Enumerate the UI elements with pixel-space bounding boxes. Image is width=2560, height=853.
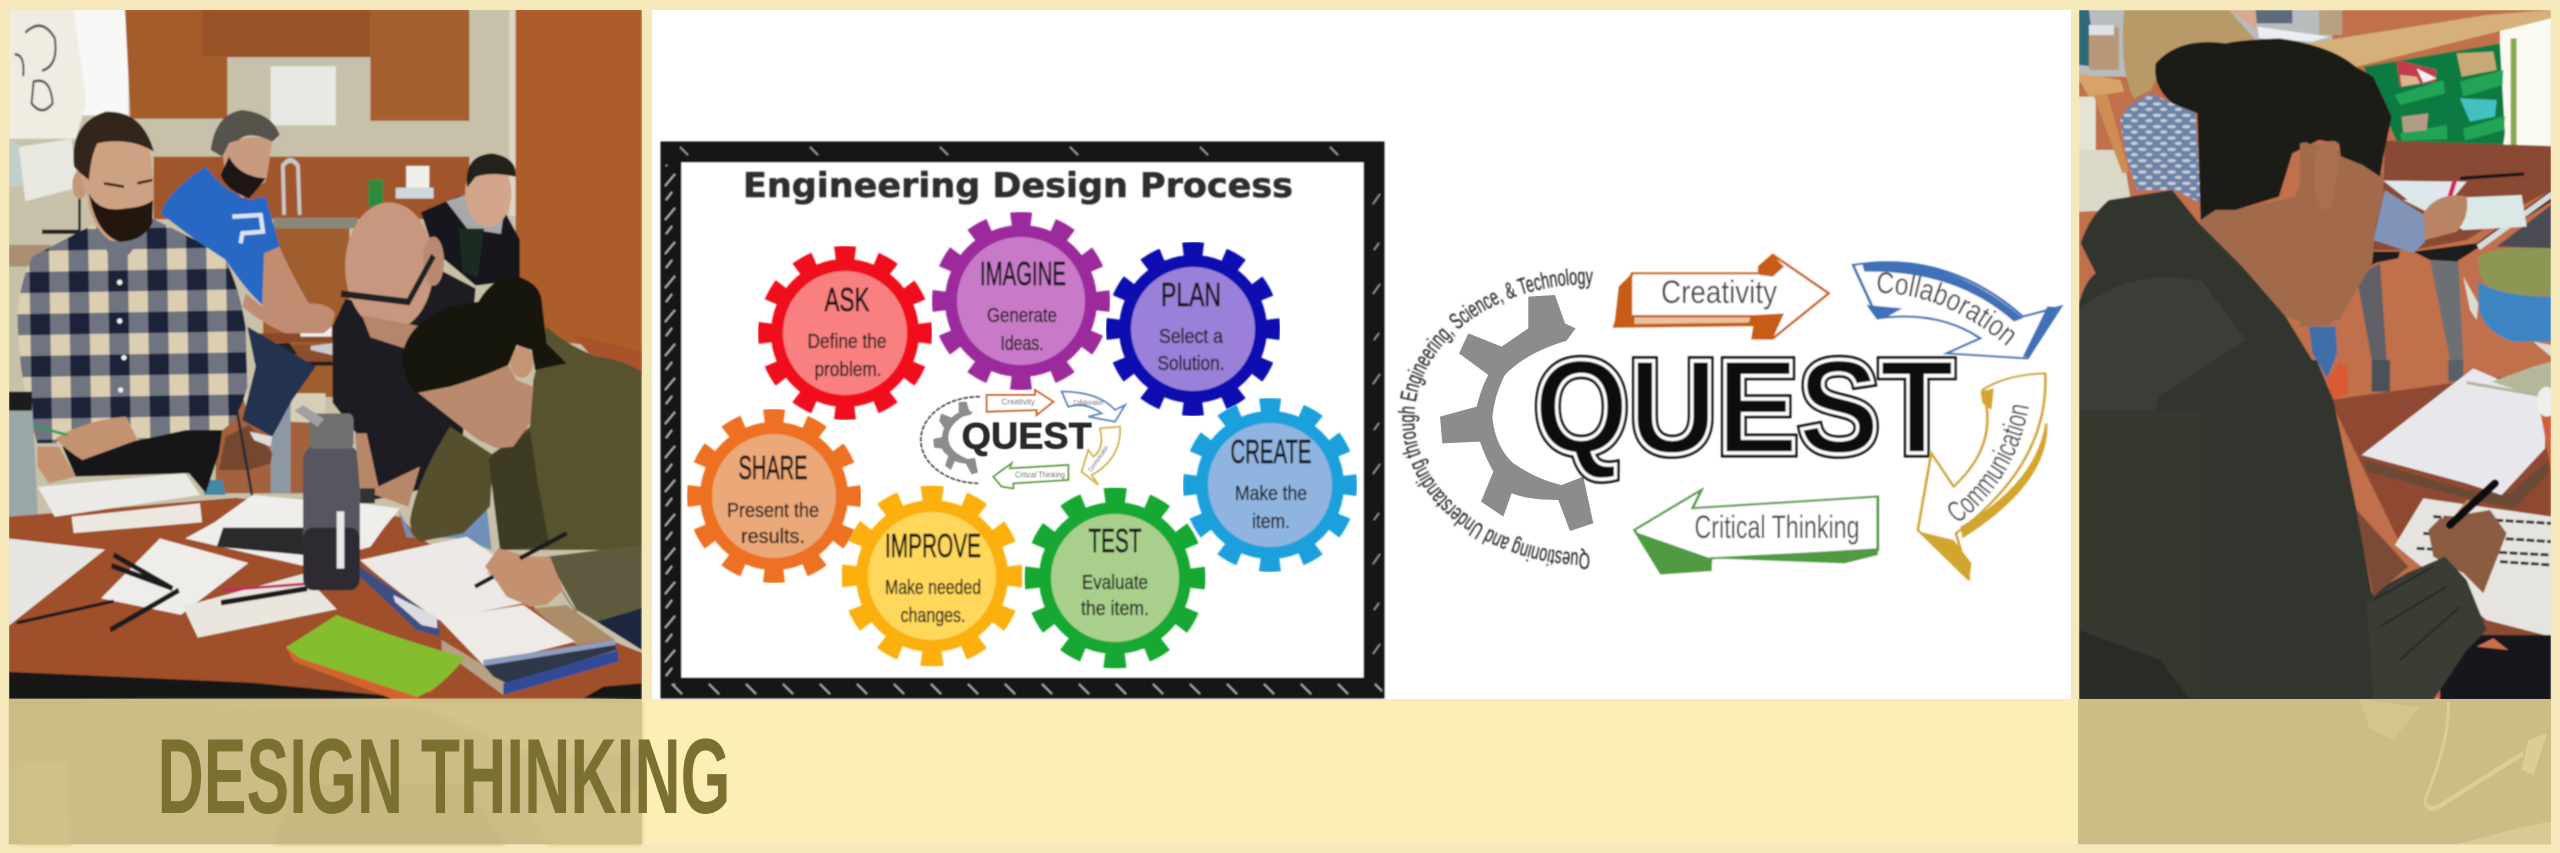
photo reflection behind title: right [2078, 699, 2551, 844]
gear: IMPROVE: IMPROVE [885, 527, 981, 564]
arrow: Collaboration: Collaboration [1876, 270, 2016, 346]
panel: QUEST logo [1396, 252, 2064, 582]
QUEST wordmark: QUEST [1534, 333, 1954, 482]
center panel background [652, 10, 2071, 699]
arrow: Communication: Communication [1947, 404, 2030, 522]
title: DESIGN THINKING [158, 716, 730, 836]
gear: TEST: Evaluate [1082, 572, 1148, 594]
photo reflection behind title: left [9, 699, 642, 844]
gear: SHARE: results. [741, 526, 805, 548]
mini QUEST logo: Creativity [1002, 397, 1035, 406]
photo: student writing at a desk [2079, 10, 2557, 700]
QUEST wordmark: QUEST [1534, 333, 1954, 482]
gear: IMPROVE [850, 494, 1014, 658]
gear: ASK: Define the [808, 331, 886, 353]
gear: TEST [1033, 496, 1197, 660]
gear: PLAN [1114, 250, 1272, 408]
gear: SHARE [695, 417, 853, 575]
arrow: Creativity: Creativity [1661, 274, 1777, 310]
mini QUEST logo [921, 390, 1125, 488]
gear: IMAGINE: Ideas. [1000, 333, 1044, 355]
gear: IMAGINE: IMAGINE [980, 255, 1066, 292]
gear: IMPROVE: changes. [900, 605, 966, 627]
gear: IMAGINE [940, 220, 1102, 382]
gear: ASK [766, 254, 924, 412]
gear: CREATE [1191, 406, 1349, 564]
gear: CREATE: CREATE [1230, 433, 1312, 470]
mini QUEST logo: QUEST [962, 414, 1092, 456]
chalk frame [662, 143, 1383, 698]
gear: CREATE: item. [1252, 511, 1290, 533]
gear: TEST: TEST [1088, 522, 1142, 559]
gear: TEST: the item. [1081, 598, 1149, 620]
title band [9, 699, 2551, 844]
icon: grey gear [1440, 295, 1593, 531]
arrow: Collaboration [1850, 260, 2064, 360]
gear: PLAN: Solution. [1158, 353, 1224, 375]
arrow: Creativity [1614, 255, 1829, 338]
panel: Engineering Design Process chart [662, 143, 1383, 698]
mini QUEST logo: Communication [1087, 445, 1110, 473]
arrow: Communication [1916, 371, 2048, 582]
gear: IMPROVE: Make needed [885, 577, 981, 599]
gear: ASK: problem. [814, 359, 882, 381]
arrow: Critical Thinking [1634, 490, 1878, 573]
chart heading: Engineering Design Process [743, 166, 1293, 206]
mini QUEST logo: Collaboration [1073, 398, 1103, 407]
mini QUEST logo: Critical Thinking [1015, 470, 1065, 479]
gear: SHARE: SHARE [738, 449, 808, 486]
gear: ASK: ASK [824, 281, 870, 318]
gear: IMAGINE: Generate [987, 305, 1057, 327]
gear: PLAN: PLAN [1161, 276, 1221, 313]
gear: CREATE: Make the [1235, 483, 1307, 505]
photo: teachers working around a table [9, 9, 642, 700]
gear: PLAN: Select a [1159, 326, 1224, 348]
gear: SHARE: Present the [727, 500, 819, 522]
arrow: Critical Thinking: Critical Thinking [1694, 509, 1860, 545]
curved tagline: Questioning and Understanding through Engineering, Science, & Technology [1396, 268, 1594, 570]
